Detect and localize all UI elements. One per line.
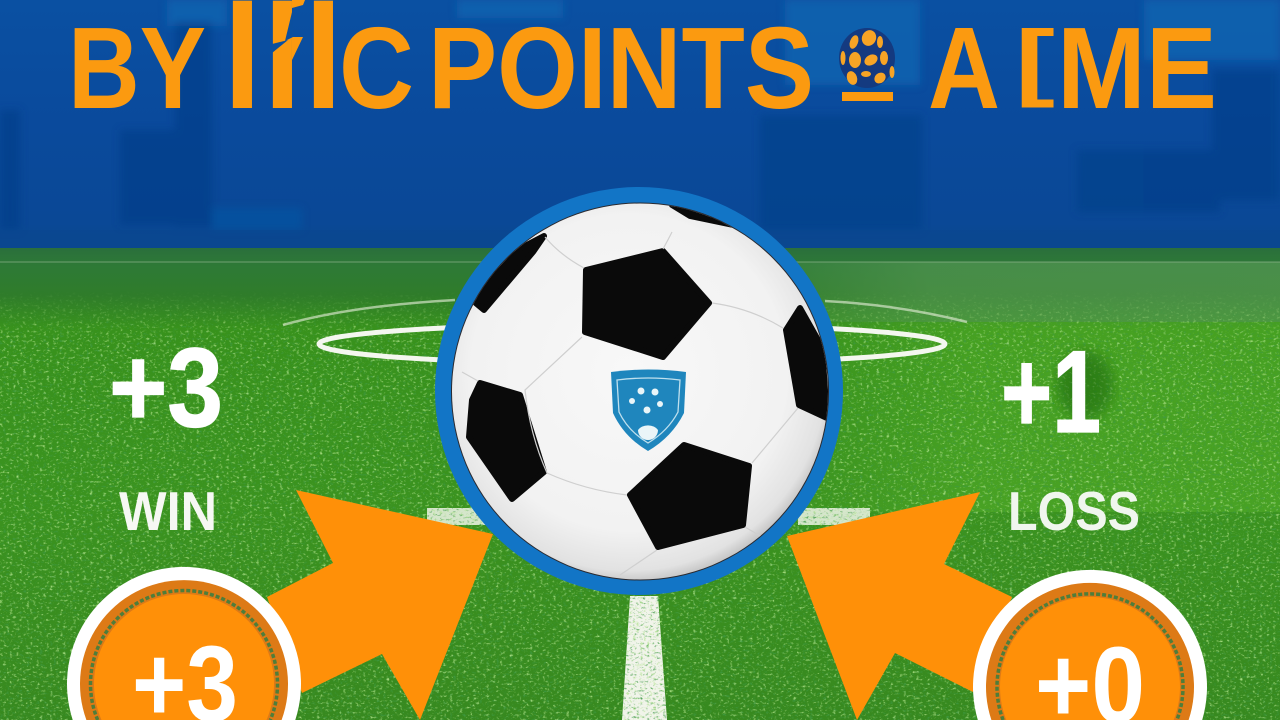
ball seams xyxy=(462,232,798,575)
outer arcs xyxy=(283,300,967,325)
title: C xyxy=(339,3,414,133)
title: POINTS xyxy=(428,3,814,133)
win label: WIN xyxy=(119,480,217,542)
soccer ball xyxy=(435,187,843,595)
shadow behind draw value xyxy=(1057,351,1113,419)
right badge xyxy=(973,570,1207,720)
arrow: left to ball xyxy=(267,490,493,720)
football pitch xyxy=(0,248,1280,720)
draw points value: +1 xyxy=(1001,326,1101,457)
centre circle xyxy=(319,324,945,364)
left badge xyxy=(67,567,301,720)
title: ME xyxy=(1057,3,1217,133)
title xyxy=(68,0,1217,141)
icon: small title ball xyxy=(839,28,895,101)
title: [ xyxy=(1015,14,1055,109)
title fragment: garbled letters xyxy=(224,0,342,141)
ball crest shield xyxy=(611,370,686,451)
loss label: LOSS xyxy=(1008,480,1140,542)
background: city skyline xyxy=(0,0,1280,248)
ball panels xyxy=(469,205,827,547)
title: BY xyxy=(68,3,206,133)
win points value: +3 xyxy=(109,325,223,450)
arrow: right to ball xyxy=(787,492,1012,720)
title: A xyxy=(928,3,1000,133)
centre line segments xyxy=(427,508,870,720)
